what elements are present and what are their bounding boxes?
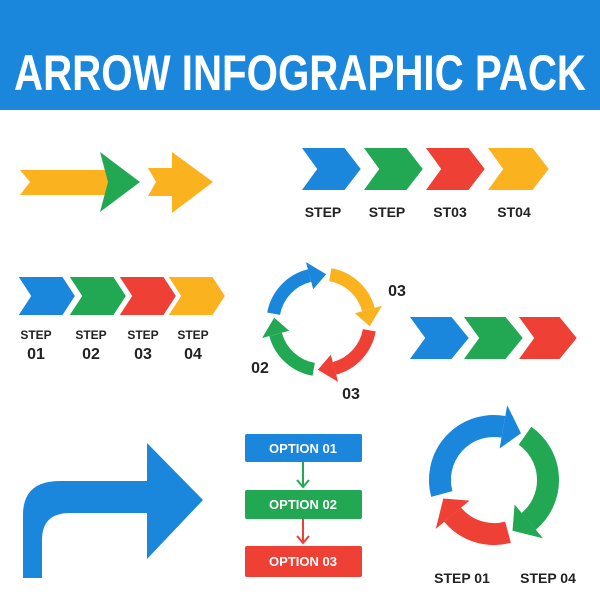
chevron row left with step labels: STEP xyxy=(127,328,159,342)
chevron row left with step labels: STEP xyxy=(20,328,52,342)
arrow group: yellow and green arrows top-left xyxy=(20,152,213,213)
cycle diagram: three arrows with labels xyxy=(434,405,576,586)
header banner xyxy=(0,0,600,110)
bent arrow xyxy=(23,443,203,578)
chevron row top-right with labels: STEP xyxy=(305,204,341,220)
cycle diagram: four arrows: 02 xyxy=(251,360,269,377)
chevron row top-right with labels: STEP xyxy=(369,204,405,220)
chevron row left with step labels: 03 xyxy=(134,346,152,363)
chevron row left with step labels: 04 xyxy=(184,346,202,363)
cycle diagram: four arrows: 03 xyxy=(388,283,406,300)
chevron row top-right with labels: ST04 xyxy=(497,204,531,220)
chevron row right xyxy=(408,316,578,360)
chevron row left with step labels: 01 xyxy=(27,346,45,363)
chevron row left with step labels: STEP xyxy=(75,328,107,342)
flow chart: options xyxy=(245,434,362,577)
flow chart: options: OPTION 03 xyxy=(269,554,337,569)
flow chart: options: OPTION 02 xyxy=(269,497,337,512)
chevron row top-right with labels: ST03 xyxy=(433,204,467,220)
cycle diagram: three arrows with labels: STEP 04 xyxy=(520,570,576,586)
chevron row left with step labels xyxy=(17,276,226,363)
chevron row left with step labels: 02 xyxy=(82,346,100,363)
chevron row top-right with labels xyxy=(300,147,550,220)
cycle diagram: three arrows with labels: STEP 01 xyxy=(434,570,490,586)
cycle diagram: four arrows xyxy=(251,262,406,403)
flow chart: options: OPTION 01 xyxy=(269,441,337,456)
cycle diagram: four arrows: 03 xyxy=(342,386,360,403)
chevron row left with step labels: STEP xyxy=(177,328,209,342)
